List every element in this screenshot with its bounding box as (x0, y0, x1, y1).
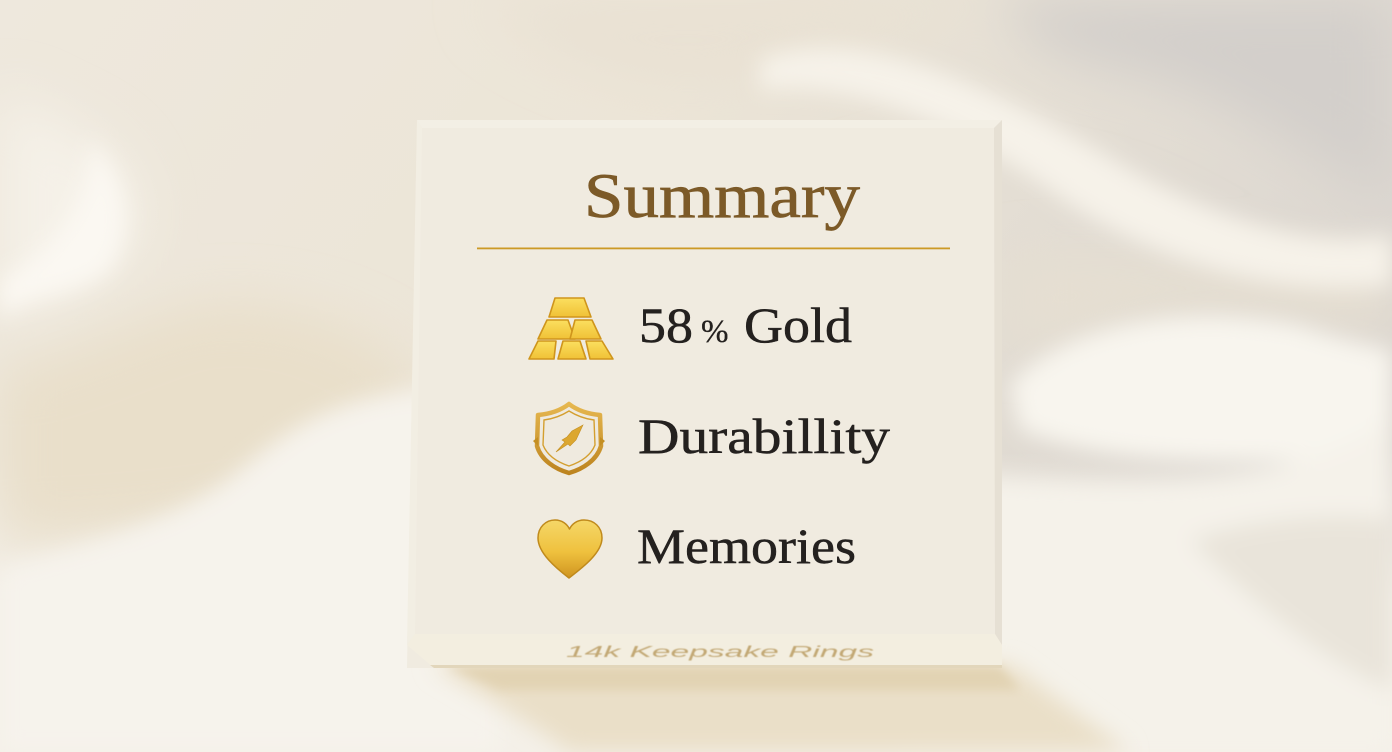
row: 58% Gold: % (701, 314, 728, 350)
box bottom edge (407, 634, 1002, 668)
divider line (477, 248, 950, 249)
title: Summary (584, 161, 861, 231)
row: 58% Gold: Gold (744, 297, 852, 353)
icon: gold bars (529, 298, 613, 359)
row: Durabillity: Durabillity (638, 408, 890, 464)
panel: keepsake box (407, 120, 1002, 668)
icon: shield (533, 404, 605, 473)
box edge label: 14k Keepsake Rings (566, 644, 875, 661)
soft shadow under box (430, 664, 1130, 752)
icon: gold heart (538, 520, 602, 578)
row: Memories: Memories (637, 518, 856, 574)
box front face (407, 120, 1002, 668)
row: 58% Gold: 58 (639, 297, 693, 353)
